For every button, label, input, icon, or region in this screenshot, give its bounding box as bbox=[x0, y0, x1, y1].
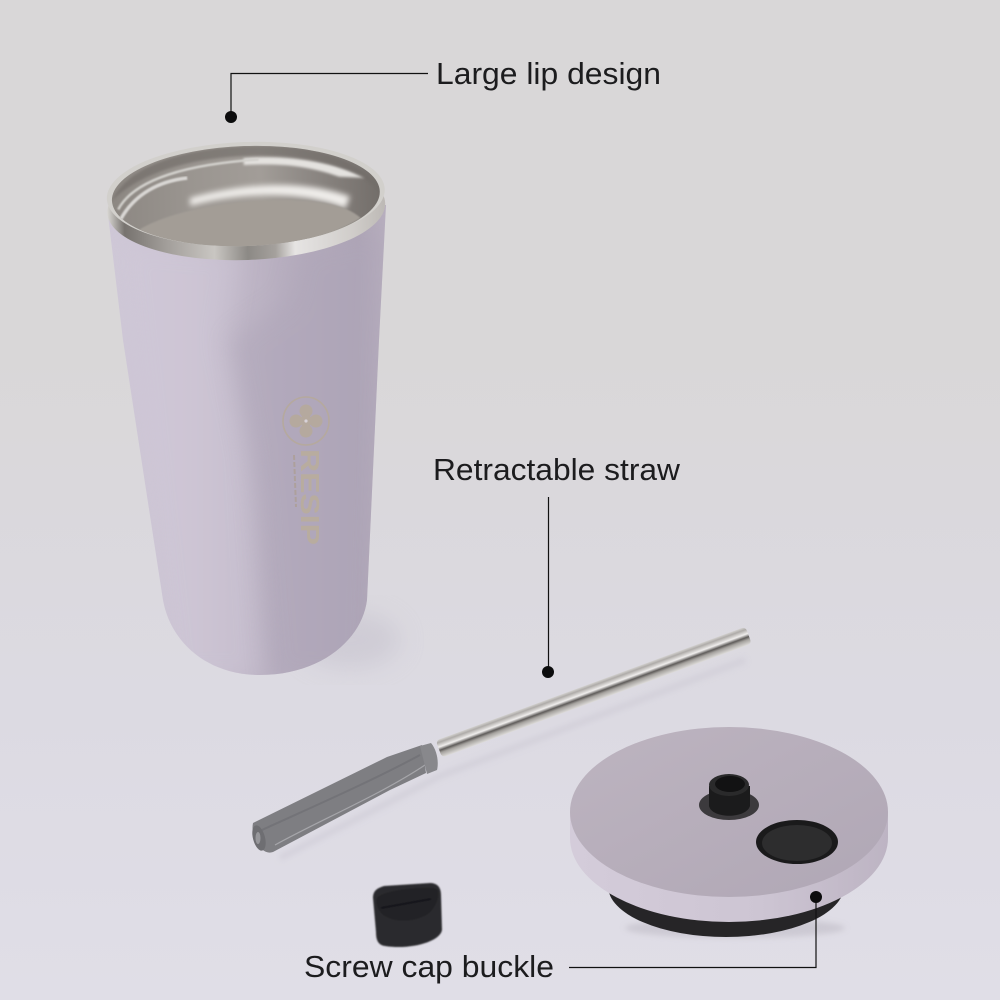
drink port bbox=[756, 820, 838, 864]
metal tube bbox=[436, 627, 752, 758]
leader line bbox=[231, 74, 428, 117]
silicone sleeve bbox=[253, 745, 426, 853]
cap side bbox=[373, 883, 442, 947]
marker dot bbox=[542, 666, 554, 678]
tumbler logo bbox=[283, 397, 329, 545]
straw bbox=[250, 627, 752, 858]
interior bbox=[112, 146, 380, 246]
sleeve opening bbox=[250, 824, 268, 852]
logo emblem bbox=[283, 397, 329, 445]
label: Large lip design bbox=[436, 56, 661, 91]
cap top bbox=[376, 888, 438, 921]
lid shadow bbox=[625, 918, 845, 938]
lid top bbox=[570, 727, 888, 897]
callout: screw cap buckle bbox=[304, 891, 822, 984]
tumbler shadow bbox=[300, 612, 400, 668]
rim front band bbox=[106, 151, 387, 265]
dark upper wall bbox=[114, 146, 366, 198]
straw port bbox=[699, 774, 759, 820]
callout: retractable straw bbox=[433, 452, 681, 678]
infographic canvas bbox=[106, 62, 888, 984]
leader line bbox=[569, 897, 816, 968]
leader line bbox=[548, 497, 550, 672]
callout: large lip design bbox=[225, 56, 661, 123]
label: Retractable straw bbox=[433, 452, 681, 487]
screw threads bbox=[117, 160, 260, 209]
marker dot bbox=[810, 891, 822, 903]
lower bright band bbox=[190, 182, 350, 214]
interior wall bbox=[112, 146, 380, 246]
rim top surface bbox=[105, 137, 387, 251]
upper bright band bbox=[242, 156, 364, 180]
tumbler bbox=[100, 135, 400, 680]
tumbler body bbox=[100, 200, 400, 680]
black base bbox=[608, 835, 844, 937]
screw cap bbox=[373, 883, 442, 947]
logo wordmark: RESIP bbox=[295, 449, 325, 545]
lid bbox=[570, 727, 888, 938]
marker dot bbox=[225, 111, 237, 123]
stainless rim bbox=[107, 142, 386, 260]
interior floor bbox=[140, 200, 360, 246]
sleeve collar bbox=[420, 743, 438, 774]
straw shadow bbox=[280, 660, 745, 858]
label: Screw cap buckle bbox=[304, 949, 554, 984]
lid side bbox=[570, 754, 888, 922]
